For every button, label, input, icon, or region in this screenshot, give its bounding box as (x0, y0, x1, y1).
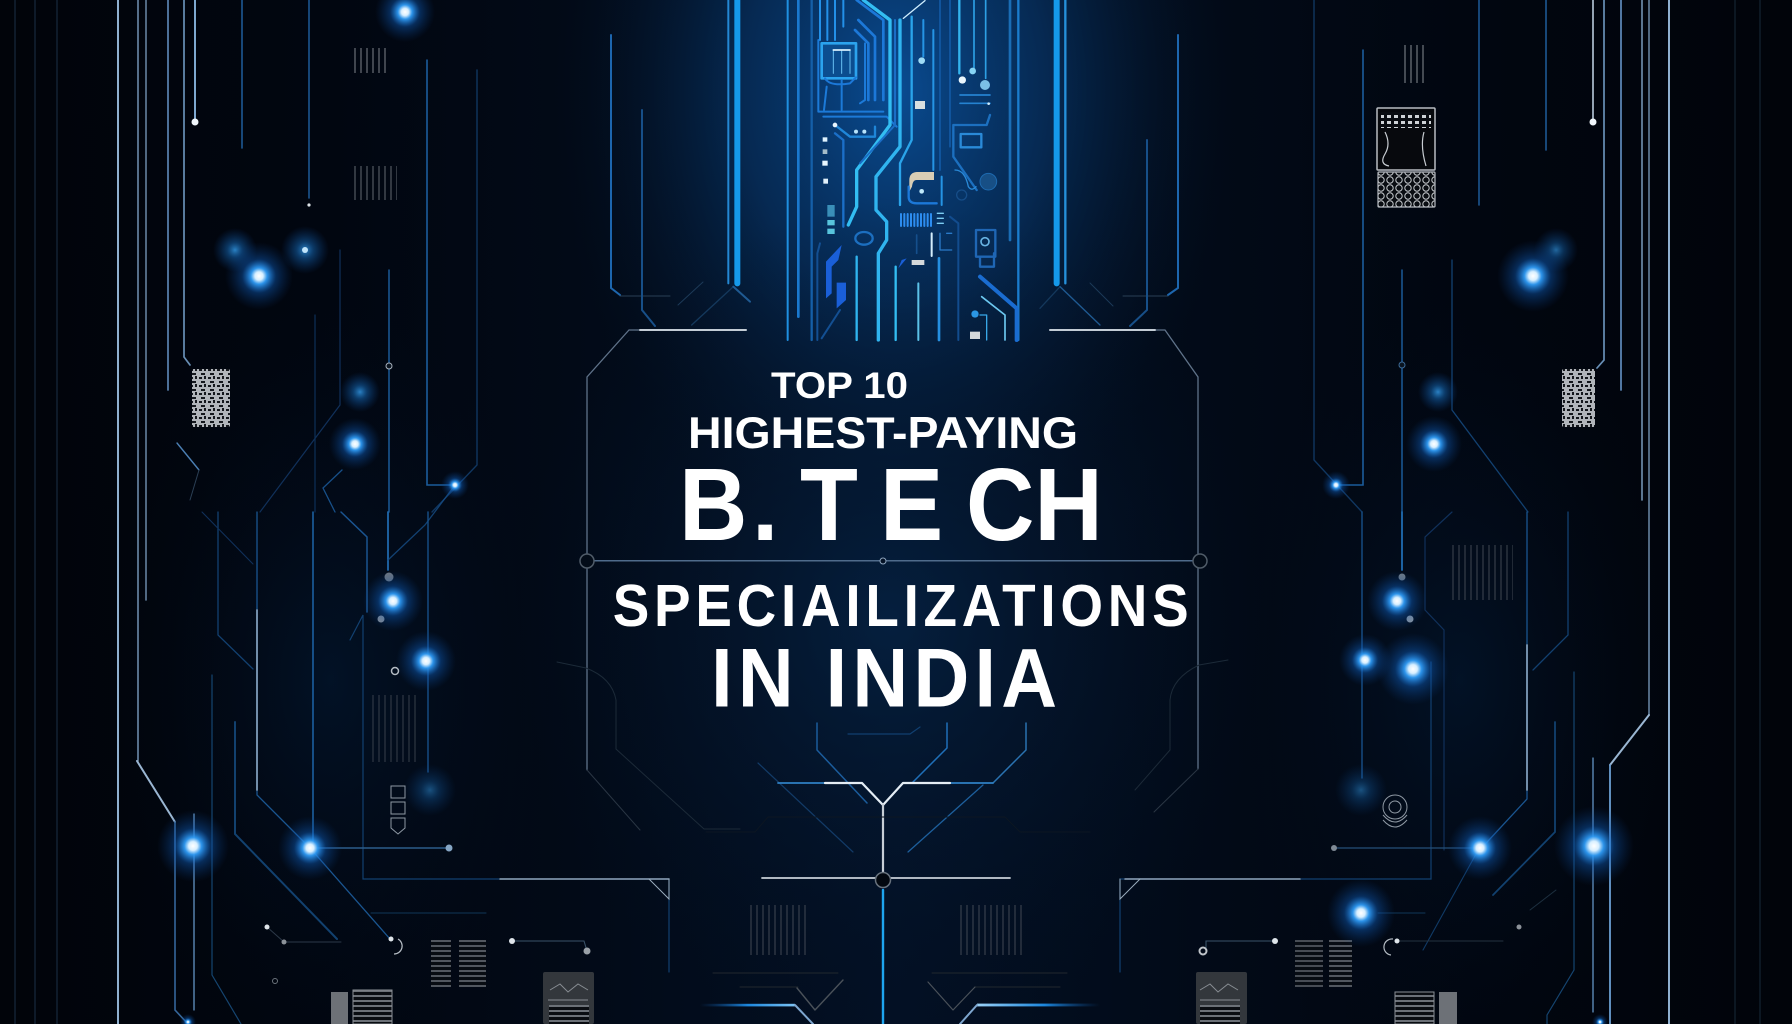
deep blue blocks (826, 245, 907, 308)
outer side traces (692, 0, 1100, 340)
central top circuit (692, 0, 1100, 340)
central bottom branching connector (700, 723, 1100, 1024)
title line: Top 10: TOP 10 (771, 364, 908, 406)
title line: Highest-Paying: HIGHEST-PAYING (688, 409, 1078, 458)
glowing nodes left (157, 0, 469, 1024)
lower left traces (817, 243, 840, 340)
title line: Specializations: SPECIAILIZATIONS (613, 573, 1189, 640)
rounded socket and coil (855, 172, 952, 256)
chip block with traces (818, 0, 897, 227)
chip icons (192, 108, 1595, 1024)
component dots (822, 57, 990, 339)
title line: In India: IN INDIA (711, 632, 1057, 725)
upper flanking traces (611, 35, 1178, 326)
title text (613, 364, 1189, 725)
title frame (557, 330, 1228, 830)
faint barcode blocks (352, 45, 1513, 955)
right circuit lines (1120, 0, 1760, 1024)
title line: B.Tech: B.TECH (679, 446, 1103, 562)
glowing nodes right (1322, 228, 1634, 1024)
bright cyan traces (848, 0, 986, 340)
left circuit lines (15, 0, 669, 1024)
right chip details (950, 95, 1017, 340)
small connector nodes (192, 118, 1596, 984)
